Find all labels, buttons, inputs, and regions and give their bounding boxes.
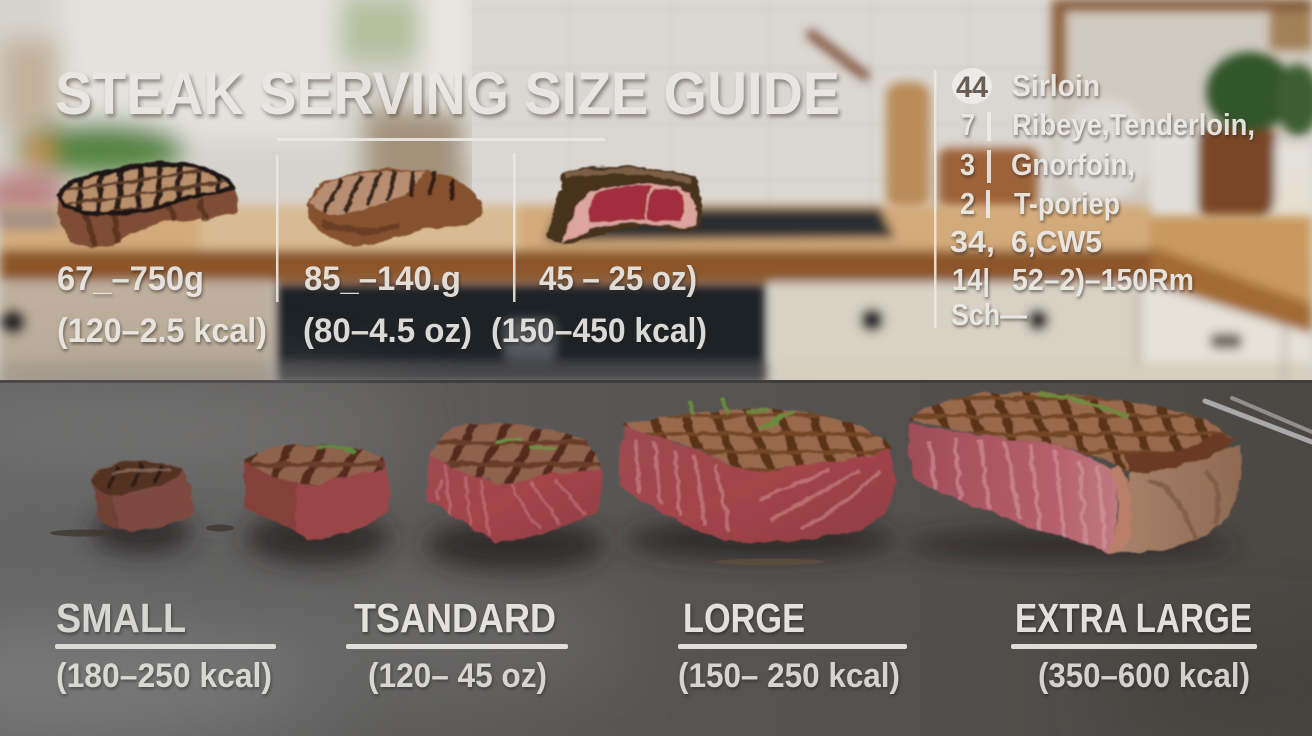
label: large: LORGE <box>683 595 805 641</box>
side list: steak cuts: Ribeye,Tenderloin, <box>1012 107 1255 142</box>
label: small <box>55 595 276 695</box>
juice splatter <box>50 524 825 566</box>
label: large <box>678 595 907 695</box>
top row serving figures: (120–2.5 kcal) <box>57 312 267 350</box>
label: standard <box>346 595 568 695</box>
title: STEAK SERVING SIZE GUIDE <box>55 60 840 127</box>
steak: small <box>92 462 193 532</box>
top row serving figures: 45 – 25 oz) <box>539 260 697 298</box>
side list: steak cuts: T-poriep <box>1014 186 1120 221</box>
side list: steak cuts: 7 <box>961 107 975 142</box>
label: extra large: (350–600 kcal) <box>1038 657 1250 695</box>
side list: steak cuts: 34, <box>950 224 995 259</box>
label: extra large: EXTRA LARGE <box>1015 595 1252 641</box>
dividers: top panel <box>276 70 936 328</box>
steak: standard small <box>243 444 389 540</box>
top row serving figures <box>57 260 707 350</box>
side list: steak cuts: 14| <box>952 262 990 297</box>
side list: steak cuts: Sirloin <box>1012 68 1100 103</box>
label: standard: TSANDARD <box>354 595 556 641</box>
steak: top row right cut showing red interior <box>548 166 702 243</box>
top row serving figures: 85_–140.g <box>304 260 461 298</box>
icon: number badge: 44 <box>956 71 988 104</box>
side list: steak cuts: 3 <box>960 147 975 182</box>
steak: large <box>619 398 895 542</box>
steak: top row left grilled <box>57 164 238 248</box>
top row serving figures: (150–450 kcal) <box>491 312 707 350</box>
label: large: (150– 250 kcal) <box>678 657 900 695</box>
label: extra large <box>1011 595 1257 695</box>
top row serving figures: 67_–750g <box>57 260 204 298</box>
side list: steak cuts: Sch— <box>951 297 1027 332</box>
steak shadows <box>92 510 1235 571</box>
side list: steak cuts <box>950 68 1255 332</box>
side list: steak cuts: 6,CW5 <box>1011 224 1102 259</box>
top row serving figures: (80–4.5 oz) <box>303 312 472 350</box>
steak: standard <box>427 423 603 543</box>
side list: steak cuts: Gnorfoin, <box>1011 147 1135 182</box>
label: small: SMALL <box>56 595 186 641</box>
label: small: (180–250 kcal) <box>56 657 272 695</box>
knife and fork <box>1205 398 1312 442</box>
side list: steak cuts: 2 <box>960 186 975 221</box>
steak: extra large <box>908 392 1242 552</box>
label: standard: (120– 45 oz) <box>368 657 547 695</box>
steak: top row center grilled <box>306 169 482 246</box>
countertop <box>0 380 1312 736</box>
side list: steak cuts: 52–2)–150Rm <box>1012 262 1194 297</box>
background: blurred kitchen <box>0 0 1312 386</box>
